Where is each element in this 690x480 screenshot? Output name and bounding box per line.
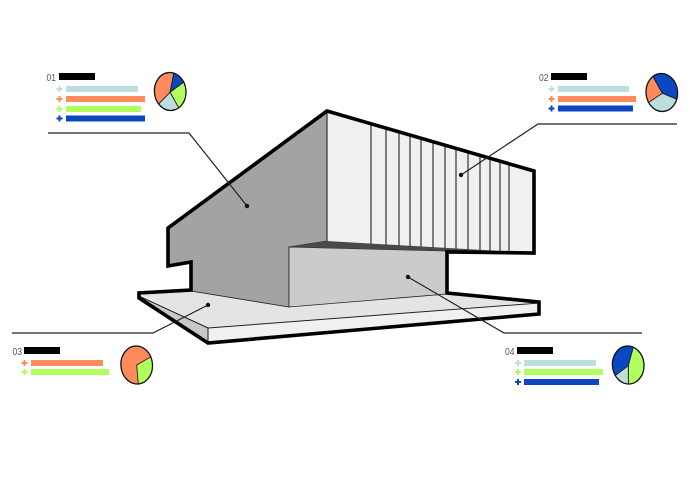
slab top surface: [139, 291, 539, 328]
leader line 03: [12, 303, 210, 333]
grey side wall: [168, 111, 327, 307]
legend 04 bars: [515, 360, 603, 385]
legend 02: 02: [539, 72, 549, 84]
legend 01 bars: [56, 86, 145, 122]
infographic canvas: [12, 72, 678, 385]
facade vertical lines: [327, 111, 509, 252]
lower recessed wall: [289, 247, 447, 307]
leader line 01: [48, 133, 249, 208]
legend 03: 03: [12, 346, 22, 358]
pie chart 01: [154, 72, 187, 112]
legend 03 bars: [22, 360, 109, 375]
legend 01: [46, 72, 187, 122]
legend 04: [505, 345, 645, 385]
leader line 04: [406, 275, 642, 333]
legend 04: 04: [505, 346, 515, 358]
shadow under the overhang: [289, 241, 534, 253]
legend 03: [12, 345, 154, 385]
building outline: [139, 111, 539, 343]
legend 01: 01: [46, 72, 56, 84]
white upper facade: [327, 111, 534, 253]
slab left side: [139, 296, 208, 343]
leader line 02: [459, 124, 677, 177]
slab front face: [208, 303, 539, 343]
legend 02: [539, 72, 678, 112]
pie chart 04: [612, 345, 645, 385]
building illustration: [139, 111, 539, 343]
legend 02 bars: [548, 86, 636, 112]
pie chart 03: [120, 345, 154, 385]
pie chart 02: [645, 72, 678, 112]
